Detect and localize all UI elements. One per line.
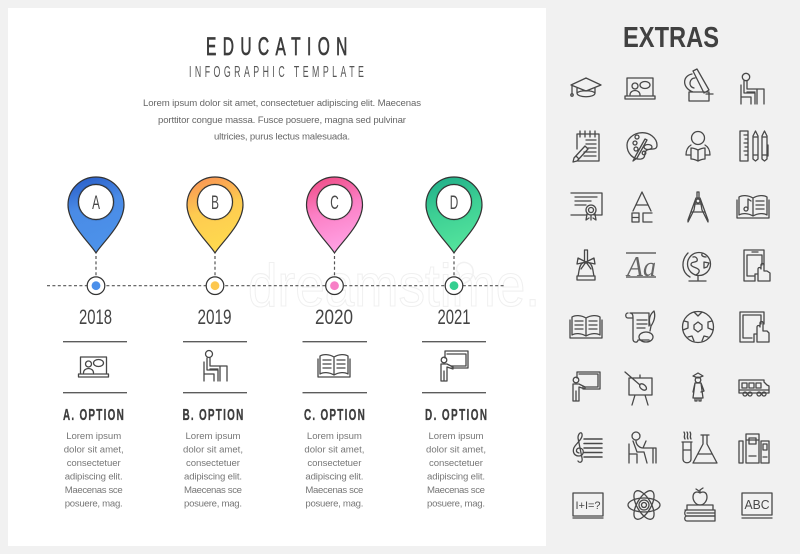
intro text: ultricies, purus lectus malesuada.: [214, 132, 350, 142]
icon: ABC letters: [632, 192, 652, 222]
column D marker: D: [450, 193, 458, 214]
year labels: 2020: [315, 306, 353, 329]
year labels: 2021: [438, 306, 470, 329]
option A text: Maecenas sce: [65, 485, 123, 496]
icon: open book C: [318, 355, 350, 377]
year labels: 2018: [79, 306, 112, 329]
option headings: D. OPTION: [425, 406, 487, 424]
option C text: posuere, mag.: [305, 498, 363, 510]
option B text: adipiscing elit.: [184, 472, 242, 482]
option C text: dolor sit amet,: [304, 444, 364, 456]
column C marker: [306, 177, 362, 295]
icon: seated student B: [204, 350, 227, 381]
year labels: 2019: [198, 306, 232, 329]
icon: open book: [570, 316, 602, 338]
option A text: posuere, mag.: [65, 498, 123, 510]
icon: tablet and hand: [740, 312, 769, 342]
icon: paint palette: [627, 133, 657, 161]
icon: test tube and flask: [682, 432, 717, 463]
icon: apple on books: [685, 488, 715, 521]
icon: microscope: [685, 69, 713, 101]
icon: female graduate: [693, 373, 704, 401]
option B text: Maecenas sce: [184, 485, 242, 496]
option C text: Lorem ipsum: [307, 431, 362, 442]
icon: student at desk: [629, 432, 656, 463]
option B text: Lorem ipsum: [186, 431, 240, 442]
icon: online class A: [78, 357, 108, 377]
column C marker: C: [330, 193, 339, 214]
option D text: dolor sit amet,: [426, 444, 486, 456]
option headings: [63, 406, 487, 424]
icon: student reading: [686, 132, 710, 161]
icon: cursive letters: Aa: [625, 252, 656, 283]
column B marker: B: [211, 193, 219, 214]
option B text: [183, 431, 243, 510]
option A text: consectetuer: [67, 458, 121, 469]
icon: drawing compass: [688, 192, 708, 222]
icon: school bell: [577, 250, 595, 280]
icon: chalkboard ABC: ABC: [744, 497, 770, 512]
option A text: adipiscing elit.: [65, 472, 123, 482]
icon: music book: [737, 196, 769, 218]
icon: chalkboard math: [573, 493, 603, 518]
option B text: posuere, mag.: [184, 498, 242, 510]
column A marker: [68, 177, 124, 295]
intro text: porttitor congue massa. Fusce posuere, magna sed pulvinar: [158, 115, 407, 126]
option D text: posuere, mag.: [427, 498, 485, 510]
icon: scroll and quill: [626, 311, 655, 342]
option D text: consectetuer: [429, 458, 484, 469]
option headings: A. OPTION: [63, 406, 124, 424]
year labels: [79, 306, 470, 329]
option C text: consectetuer: [307, 458, 362, 469]
icon: phone and hand: [744, 250, 770, 281]
extras heading: EXTRAS: [623, 22, 719, 54]
column A marker: A: [92, 193, 100, 214]
intro text: [143, 98, 421, 142]
option C text: adipiscing elit.: [305, 472, 363, 482]
option B text: dolor sit amet,: [183, 444, 243, 456]
option B text: consectetuer: [186, 458, 241, 469]
option headings: B. OPTION: [182, 406, 243, 424]
icon: chalkboard ABC: [742, 493, 772, 518]
icon: teacher at board D: [441, 351, 468, 381]
panel: infographic card: [8, 8, 546, 546]
option D text: Maecenas sce: [427, 485, 485, 496]
icon: row of books: [739, 434, 769, 463]
intro text: Lorem ipsum dolor sit amet, consectetuer adipiscing elit. Maecenas: [143, 98, 421, 109]
icon: ruler and pencils: [740, 131, 768, 161]
watermark: dreamstime.: [248, 252, 540, 319]
title: EDUCATION: [206, 33, 347, 61]
icon: school bus: [739, 380, 769, 396]
subtitle: INFOGRAPHIC TEMPLATE: [189, 62, 364, 81]
column B marker: [187, 177, 243, 295]
icon: graduation cap: [571, 78, 601, 97]
timeline axis: [47, 285, 506, 287]
option A text: dolor sit amet,: [64, 444, 124, 456]
icon: globe: [683, 252, 710, 281]
option D text: Lorem ipsum: [428, 431, 484, 442]
column D marker: [426, 177, 482, 295]
icon: easel and brush: [625, 372, 652, 405]
icon: notepad and pencil: [573, 131, 599, 162]
option headings: C. OPTION: [304, 406, 365, 424]
icon: treble clef and staff: [573, 433, 602, 462]
option D text: adipiscing elit.: [427, 472, 485, 482]
icon: chalkboard math: I+I=?: [576, 500, 600, 512]
icon: certificate: [571, 193, 602, 220]
icon: teacher at board: [573, 372, 600, 401]
option C text: [304, 431, 364, 510]
option C text: Maecenas sce: [305, 485, 363, 496]
icon: seated student: [741, 73, 764, 104]
icon: atom: [628, 488, 660, 522]
option rules: [63, 342, 486, 393]
icon: online classroom: [625, 78, 655, 99]
icon: football: [682, 312, 714, 342]
option A text: [64, 431, 124, 510]
option D text: [426, 431, 486, 510]
option A text: Lorem ipsum: [66, 431, 121, 442]
